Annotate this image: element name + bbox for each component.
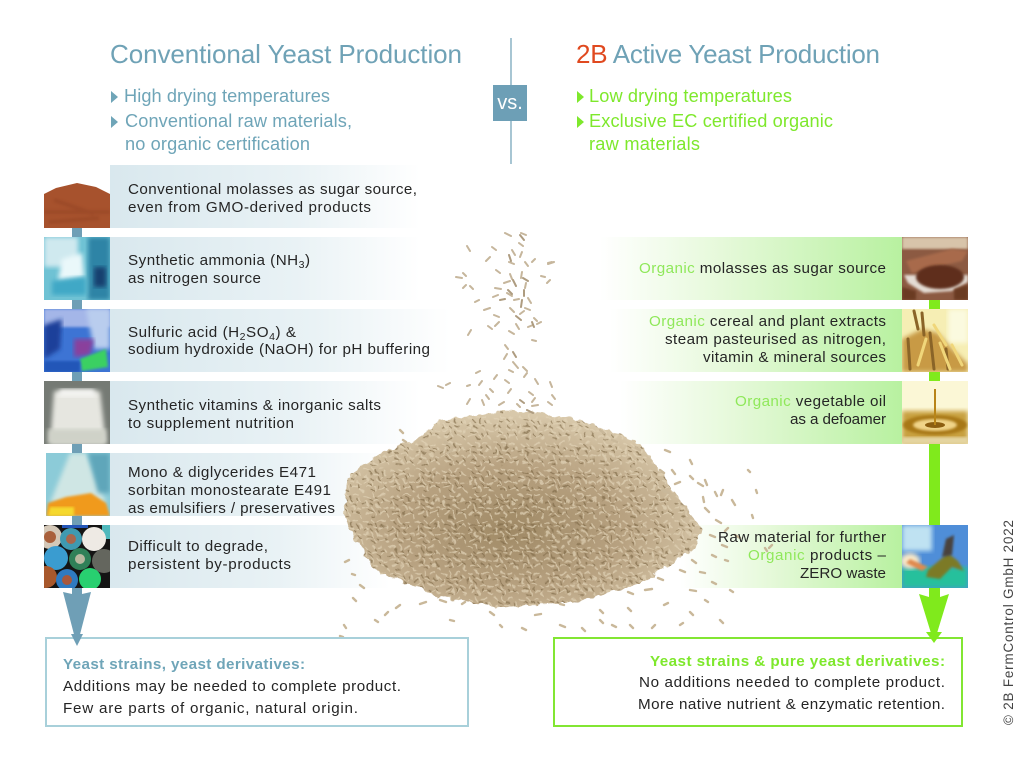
text: organic row 1: Organic molasses as sugar source xyxy=(639,260,886,277)
image: brown sugar mound xyxy=(44,183,110,228)
image: white vitamin powder xyxy=(44,381,110,444)
text: conventional row 5 xyxy=(128,464,335,517)
image: molasses on a spoon xyxy=(902,237,968,300)
text: conventional row 4: Synthetic vitamins & inorganic salts xyxy=(128,397,381,414)
text: conventional row 5: Mono & diglycerides E471 xyxy=(128,464,316,481)
text: organic row 2: steam pasteurised as nitrogen, xyxy=(665,331,886,348)
vs divider: vs. xyxy=(497,92,523,114)
text: conventional row 6: Difficult to degrade, xyxy=(128,538,268,555)
image: yeast pile xyxy=(340,233,772,647)
text: conventional row 3 xyxy=(128,324,430,358)
text: conventional row 3: sodium hydroxide (NaOH) for pH buffering xyxy=(128,341,430,358)
panel: organic row backgrounds xyxy=(600,237,902,588)
text: organic row 2 xyxy=(649,313,886,366)
arrow: organic flow xyxy=(919,237,949,643)
text: conventional row 1: even from GMO-derived products xyxy=(128,199,371,216)
text: conventional row 3: 4 xyxy=(269,331,275,343)
arrow tip: organic xyxy=(926,632,942,643)
text: conventional row 4: to supplement nutrition xyxy=(128,415,294,432)
text: organic row 3: as a defoamer xyxy=(790,411,886,428)
conventional bullet list: no organic certification xyxy=(125,134,310,154)
text: organic row 4 xyxy=(718,529,887,582)
image: lab flasks teal xyxy=(44,237,110,300)
arrow: conventional flow xyxy=(63,228,91,646)
2B bullet list: Exclusive EC certified organic xyxy=(589,111,833,131)
conventional bullet list: Conventional raw materials, xyxy=(125,111,352,131)
image: sea turtle xyxy=(902,525,968,588)
callout: conventional result: Yeast strains, yeast derivatives: xyxy=(63,656,305,673)
callout: conventional result xyxy=(46,638,468,726)
text: conventional row 5: as emulsifiers / preservatives xyxy=(128,500,335,517)
conventional bullet list: High drying temperatures xyxy=(124,86,330,106)
text: conventional row 1: Conventional molasses as sugar source, xyxy=(128,181,417,198)
text: conventional row 6: persistent by-products xyxy=(128,556,291,573)
text: conventional row 3: ) & xyxy=(275,324,296,341)
panel: conventional row backgrounds xyxy=(110,165,450,588)
callout: conventional result: Few are parts of organic, natural origin. xyxy=(63,700,358,717)
text: conventional row 2: as nitrogen source xyxy=(128,270,261,287)
text: organic row 2: Organic cereal and plant extracts xyxy=(649,313,886,330)
text: organic row 4: ZERO waste xyxy=(800,565,886,582)
image: blue and green flasks xyxy=(44,309,110,372)
callout: conventional result: Additions may be needed to complete product. xyxy=(63,678,401,695)
image: rusty barrels xyxy=(44,525,110,588)
image: oil drop ripples xyxy=(902,381,968,444)
text: conventional row 3: SO xyxy=(246,324,269,341)
vs divider xyxy=(493,38,527,164)
text: conventional row 6 xyxy=(128,538,291,573)
copyright: © 2B FermControl GmbH 2022 xyxy=(1001,520,1016,725)
text: conventional row 3: Sulfuric acid (H xyxy=(128,324,239,341)
conventional bullet list xyxy=(111,86,352,154)
callout: 2B result: Yeast strains & pure yeast derivatives: xyxy=(650,653,945,670)
text: organic row 4: Organic products – xyxy=(748,547,887,564)
text: organic row 4: Raw material for further xyxy=(718,529,886,546)
text: organic row 3: Organic vegetable oil xyxy=(735,393,886,410)
text: conventional row 2: ) xyxy=(305,252,310,269)
arrow tip: conventional xyxy=(71,634,83,646)
title: conventional yeast production: Conventional Yeast Production xyxy=(110,39,462,69)
text: conventional row 2: Synthetic ammonia (NH xyxy=(128,252,298,269)
falling and scattered yeast grains xyxy=(340,233,772,647)
text: conventional row 3: 2 xyxy=(240,331,246,343)
text: conventional row 1 xyxy=(128,181,417,216)
text: organic row 3 xyxy=(735,393,886,428)
title: 2B active yeast production: 2B Active Yeast Production xyxy=(576,39,880,69)
callout: 2B result xyxy=(554,638,962,726)
text: conventional row 2 xyxy=(128,252,310,287)
2B bullet list xyxy=(577,86,833,154)
2B bullet list: raw materials xyxy=(589,134,700,154)
2B bullet list: Low drying temperatures xyxy=(589,86,792,106)
text: conventional row 5: sorbitan monostearate E491 xyxy=(128,482,331,499)
text: conventional row 4 xyxy=(128,397,381,432)
callout: 2B result: More native nutrient & enzymatic retention. xyxy=(638,696,945,713)
image: wheat field xyxy=(902,309,968,372)
text: conventional row 2: 3 xyxy=(299,259,305,271)
callout: 2B result: No additions needed to complete product. xyxy=(639,674,945,691)
text: organic row 2: vitamin & mineral sources xyxy=(703,349,886,366)
image: flask with orange liquid xyxy=(46,453,110,516)
